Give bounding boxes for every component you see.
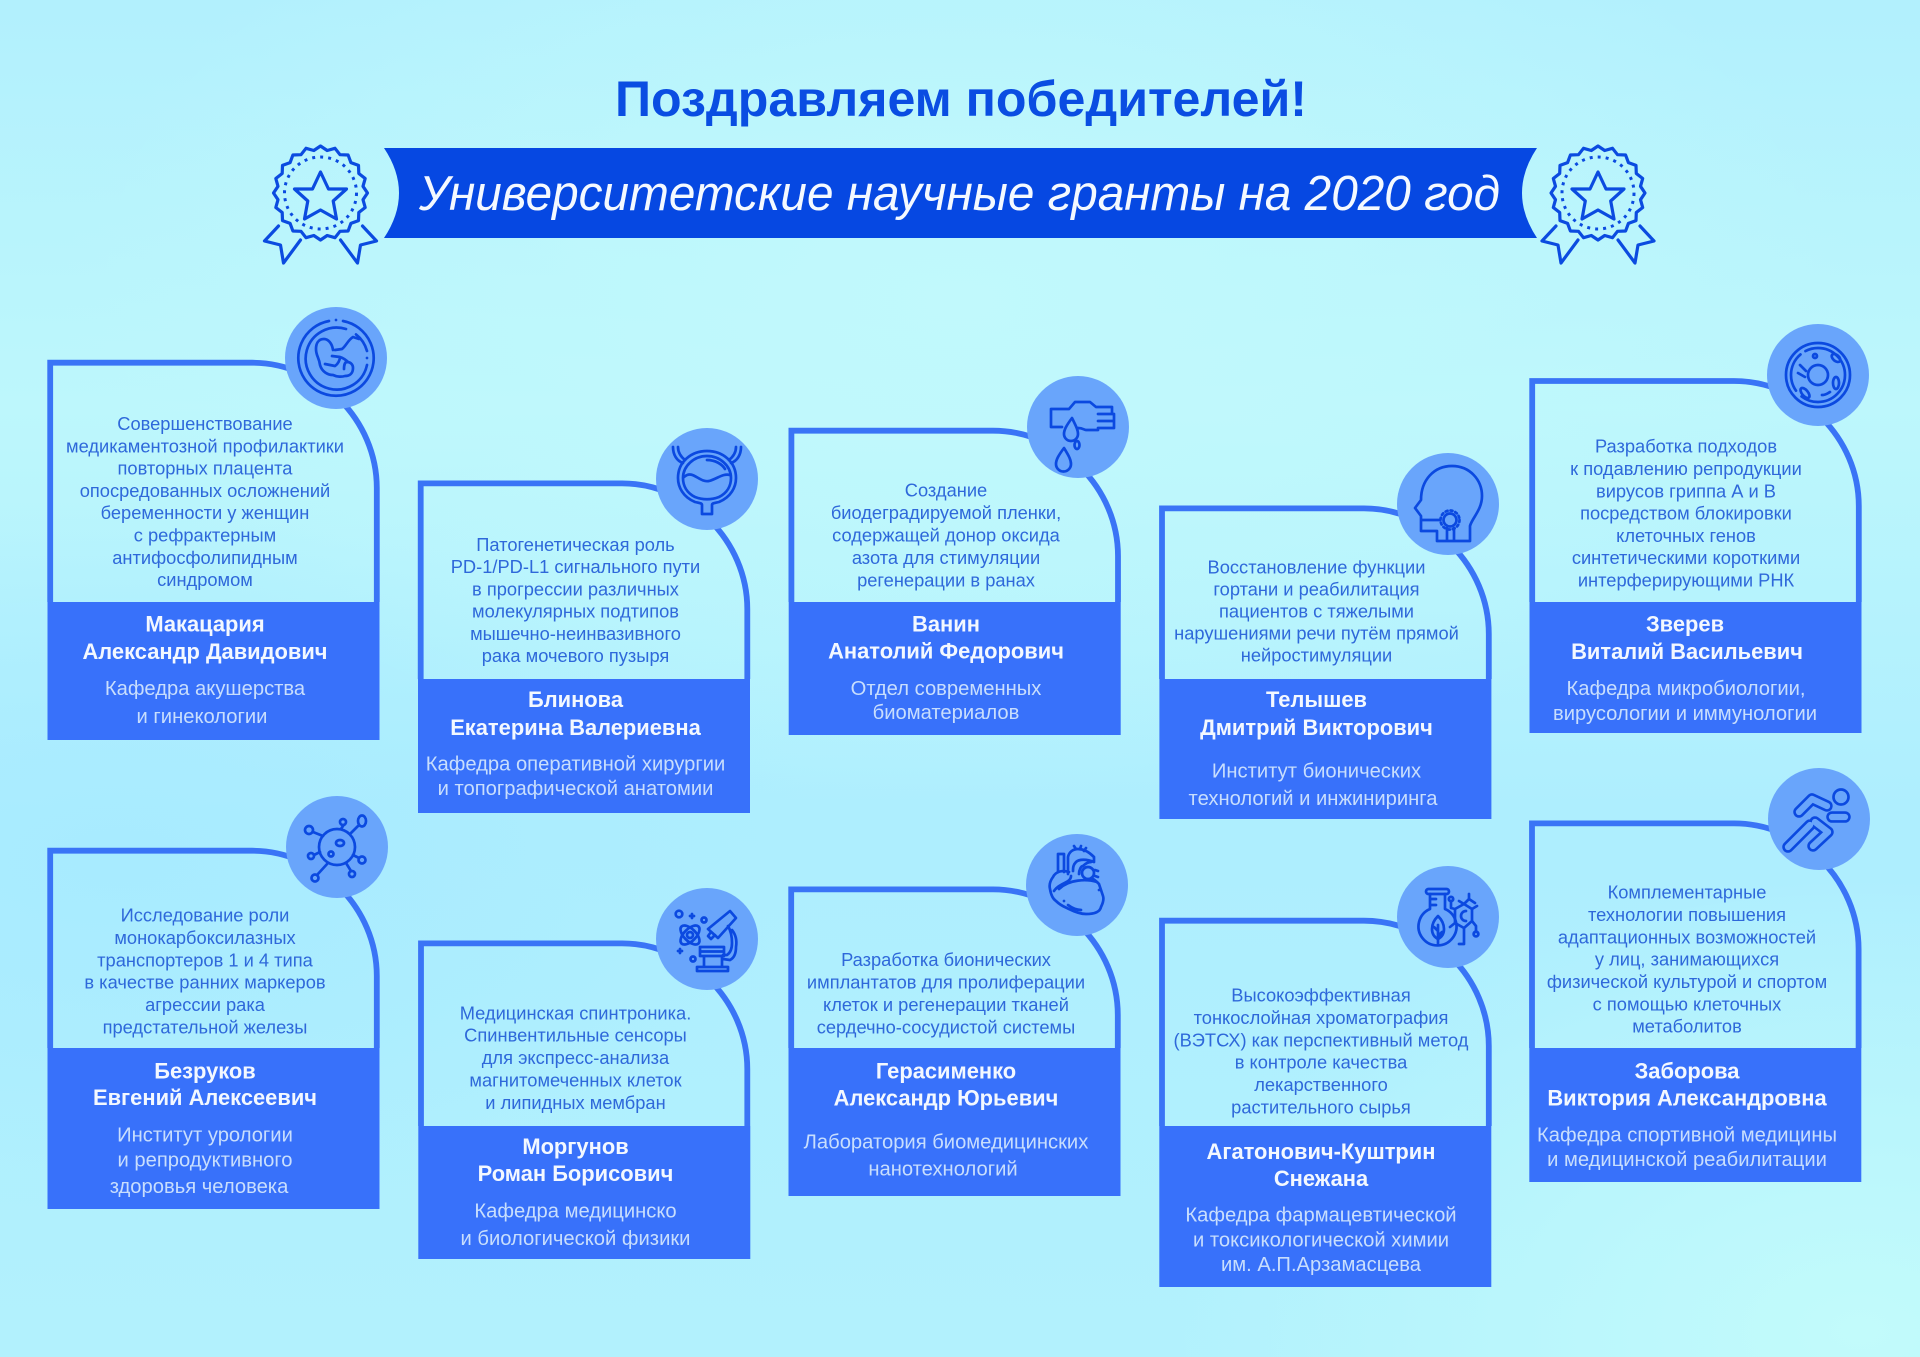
description: молекулярных подтипов bbox=[472, 601, 679, 622]
description: клеток и регенерации тканей bbox=[823, 994, 1069, 1015]
description: адаптационных возможностей bbox=[1558, 926, 1816, 947]
description: регенерации в ранах bbox=[857, 570, 1035, 591]
department bbox=[461, 1200, 690, 1250]
description: Комплементарные bbox=[1608, 882, 1766, 903]
name: Александр Давидович bbox=[82, 639, 328, 664]
icon: left rosette bbox=[264, 146, 376, 263]
description: синтетическими короткими bbox=[1572, 547, 1800, 568]
name bbox=[1571, 612, 1803, 664]
name: Анатолий Федорович bbox=[828, 638, 1064, 664]
name: Екатерина Валериевна bbox=[450, 715, 702, 740]
description: опосредованных осложнений bbox=[80, 480, 330, 501]
name: Блинова bbox=[528, 687, 624, 712]
description bbox=[831, 480, 1061, 591]
icon: hand with drops bbox=[1027, 376, 1129, 478]
department bbox=[1553, 678, 1817, 725]
department: технологий и инжиниринга bbox=[1189, 788, 1438, 810]
name bbox=[834, 1058, 1058, 1111]
description: в контроле качества bbox=[1235, 1052, 1408, 1073]
description: Патогенетическая роль bbox=[476, 534, 675, 555]
description: Разработка бионических bbox=[841, 949, 1051, 970]
name bbox=[82, 612, 328, 664]
description: у лиц, занимающихся bbox=[1595, 949, 1779, 970]
description bbox=[66, 413, 344, 590]
name: Снежана bbox=[1274, 1166, 1369, 1191]
name: Герасименко bbox=[876, 1058, 1016, 1083]
description: азота для стимуляции bbox=[852, 547, 1040, 568]
description: (ВЭТСХ) как перспективный метод bbox=[1174, 1029, 1469, 1050]
description: биодеградируемой пленки, bbox=[831, 502, 1061, 523]
description bbox=[807, 949, 1085, 1037]
description: медикаментозной профилактики bbox=[66, 435, 344, 456]
department: и репродуктивного bbox=[118, 1150, 292, 1172]
department bbox=[1537, 1125, 1837, 1171]
description: синдромом bbox=[157, 569, 253, 590]
description bbox=[1547, 882, 1827, 1037]
name: Моргунов bbox=[522, 1134, 629, 1159]
department bbox=[804, 1131, 1088, 1181]
description: лекарственного bbox=[1254, 1074, 1388, 1095]
name: Виктория Александровна bbox=[1547, 1086, 1827, 1111]
name: Александр Юрьевич bbox=[834, 1086, 1058, 1111]
description: в прогрессии различных bbox=[472, 578, 679, 599]
description: нарушениями речи путём прямой bbox=[1174, 623, 1459, 644]
description: технологии повышения bbox=[1588, 904, 1786, 925]
description: к подавлению репродукции bbox=[1570, 458, 1802, 479]
name: Заборова bbox=[1635, 1058, 1740, 1083]
name: Евгений Алексеевич bbox=[93, 1085, 317, 1110]
description: Спинвентильные сенсоры bbox=[464, 1025, 687, 1046]
description: нейростимуляции bbox=[1241, 645, 1392, 666]
name bbox=[93, 1058, 317, 1110]
description bbox=[460, 1002, 691, 1113]
department bbox=[1189, 761, 1438, 810]
description: с рефрактерным bbox=[134, 524, 276, 546]
description: беременности у женщин bbox=[101, 502, 309, 523]
icon: head with gear bbox=[1397, 453, 1499, 555]
description: Исследование роли bbox=[121, 905, 289, 926]
panel: Телышев bbox=[1159, 453, 1499, 819]
description: рака мочевого пузыря bbox=[482, 645, 669, 666]
name: Макацария bbox=[145, 612, 265, 637]
name: Виталий Васильевич bbox=[1571, 639, 1803, 664]
description: Медицинская спинтроника. bbox=[460, 1002, 691, 1023]
department: Институт бионических bbox=[1212, 761, 1421, 783]
panel: Безруков bbox=[48, 796, 388, 1209]
icon: bladder bbox=[656, 428, 758, 530]
icon: embryo bbox=[285, 307, 387, 409]
department: Кафедра фармацевтической bbox=[1185, 1205, 1457, 1227]
department: нанотехнологий bbox=[868, 1159, 1018, 1181]
department bbox=[851, 678, 1041, 724]
panel: Агатонович-Куштрин bbox=[1159, 866, 1499, 1287]
department: Отдел современных bbox=[851, 678, 1041, 700]
name bbox=[1547, 1058, 1827, 1111]
department: биоматериалов bbox=[873, 702, 1019, 724]
department: Кафедра акушерства bbox=[105, 678, 306, 700]
department: и топографической анатомии bbox=[438, 778, 713, 800]
description: предстательной железы bbox=[103, 1016, 307, 1037]
department: Лаборатория биомедицинских bbox=[804, 1131, 1088, 1153]
banner bbox=[384, 148, 1537, 238]
panel: Макацария bbox=[48, 307, 387, 740]
name: Агатонович-Куштрин bbox=[1207, 1139, 1435, 1164]
panel: Заборова bbox=[1529, 768, 1870, 1182]
name bbox=[1200, 687, 1433, 740]
description: антифосфолипидным bbox=[112, 547, 298, 568]
description: имплантатов для пролиферации bbox=[807, 971, 1085, 992]
description: растительного сырья bbox=[1231, 1096, 1411, 1117]
description: Восстановление функции bbox=[1208, 556, 1425, 577]
description: интерферирующими РНК bbox=[1578, 570, 1795, 590]
department: и медицинской реабилитации bbox=[1547, 1149, 1827, 1171]
description: PD-1/PD-L1 сигнального пути bbox=[451, 556, 700, 577]
description: монокарбоксилазных bbox=[114, 927, 296, 948]
name bbox=[828, 612, 1064, 664]
panel: Моргунов bbox=[418, 888, 758, 1259]
department bbox=[110, 1125, 293, 1198]
department: здоровья человека bbox=[110, 1176, 289, 1198]
banner text: Университетские научные гранты на 2020 год bbox=[418, 167, 1500, 221]
panel: Ванин bbox=[789, 376, 1129, 735]
description: гортани и реабилитация bbox=[1213, 578, 1420, 599]
description: тонкослойная хроматография bbox=[1194, 1007, 1448, 1028]
department: Институт урологии bbox=[117, 1125, 293, 1147]
department: и биологической физики bbox=[461, 1228, 690, 1250]
description: вирусов гриппа А и В bbox=[1596, 480, 1776, 501]
description bbox=[84, 905, 326, 1037]
description: физической культурой и спортом bbox=[1547, 971, 1827, 992]
description bbox=[1174, 556, 1459, 666]
name bbox=[450, 687, 702, 740]
name: Ванин bbox=[912, 612, 980, 637]
name bbox=[478, 1134, 673, 1186]
description: метаболитов bbox=[1632, 1016, 1742, 1037]
description: повторных плацента bbox=[118, 458, 293, 479]
panel: Блинова bbox=[418, 428, 758, 813]
description: Разработка подходов bbox=[1595, 436, 1777, 457]
department: вирусологии и иммунологии bbox=[1553, 703, 1817, 725]
description: Совершенствование bbox=[117, 413, 293, 434]
department: Кафедра микробиологии, bbox=[1566, 678, 1806, 700]
department: Кафедра спортивной медицины bbox=[1537, 1125, 1837, 1147]
description: для экспресс-анализа bbox=[482, 1047, 670, 1068]
department bbox=[426, 754, 725, 800]
icon: runner bbox=[1768, 768, 1870, 870]
icon: heart bbox=[1026, 834, 1128, 936]
department: Кафедра оперативной хирургии bbox=[426, 754, 725, 776]
description: агрессии рака bbox=[145, 994, 266, 1015]
name bbox=[1207, 1139, 1435, 1191]
name: Роман Борисович bbox=[478, 1161, 673, 1186]
title: Поздравляем победителей! bbox=[615, 71, 1307, 127]
description: транспортеров 1 и 4 типа bbox=[97, 949, 314, 970]
description: магнитомеченных клеток bbox=[469, 1070, 683, 1090]
department bbox=[105, 678, 306, 728]
icon: flask and molecule bbox=[1397, 866, 1499, 968]
department: Кафедра медицинско bbox=[474, 1200, 677, 1222]
description: посредством блокировки bbox=[1580, 503, 1792, 524]
icon: right rosette bbox=[1542, 146, 1654, 263]
description: мышечно-неинвазивного bbox=[470, 623, 681, 644]
name: Дмитрий Викторович bbox=[1200, 715, 1433, 740]
description bbox=[1570, 436, 1802, 590]
name: Безруков bbox=[154, 1058, 256, 1083]
description bbox=[451, 534, 700, 666]
description: клеточных генов bbox=[1616, 525, 1756, 546]
icon: cell bbox=[1767, 324, 1869, 426]
name: Телышев bbox=[1266, 687, 1367, 712]
panel: Зверев bbox=[1530, 324, 1869, 733]
description: с помощью клеточных bbox=[1593, 993, 1781, 1014]
description: Высокоэффективная bbox=[1231, 985, 1411, 1006]
description: в качестве ранних маркеров bbox=[84, 972, 326, 993]
department: им. А.П.Арзамасцева bbox=[1221, 1254, 1422, 1276]
description bbox=[1174, 985, 1469, 1117]
icon: microscope bbox=[656, 888, 758, 990]
description: Создание bbox=[905, 480, 987, 501]
description: пациентов с тяжелыми bbox=[1219, 600, 1414, 622]
description: сердечно-сосудистой системы bbox=[817, 1016, 1075, 1037]
department bbox=[1185, 1205, 1457, 1276]
department: и токсикологической химии bbox=[1193, 1230, 1449, 1252]
department: и гинекологии bbox=[137, 706, 267, 728]
panel: Герасименко bbox=[788, 834, 1128, 1196]
description: и липидных мембран bbox=[485, 1092, 666, 1113]
name: Зверев bbox=[1646, 612, 1724, 637]
description: содержащей донор оксида bbox=[832, 525, 1061, 546]
icon: virus bbox=[286, 796, 388, 898]
